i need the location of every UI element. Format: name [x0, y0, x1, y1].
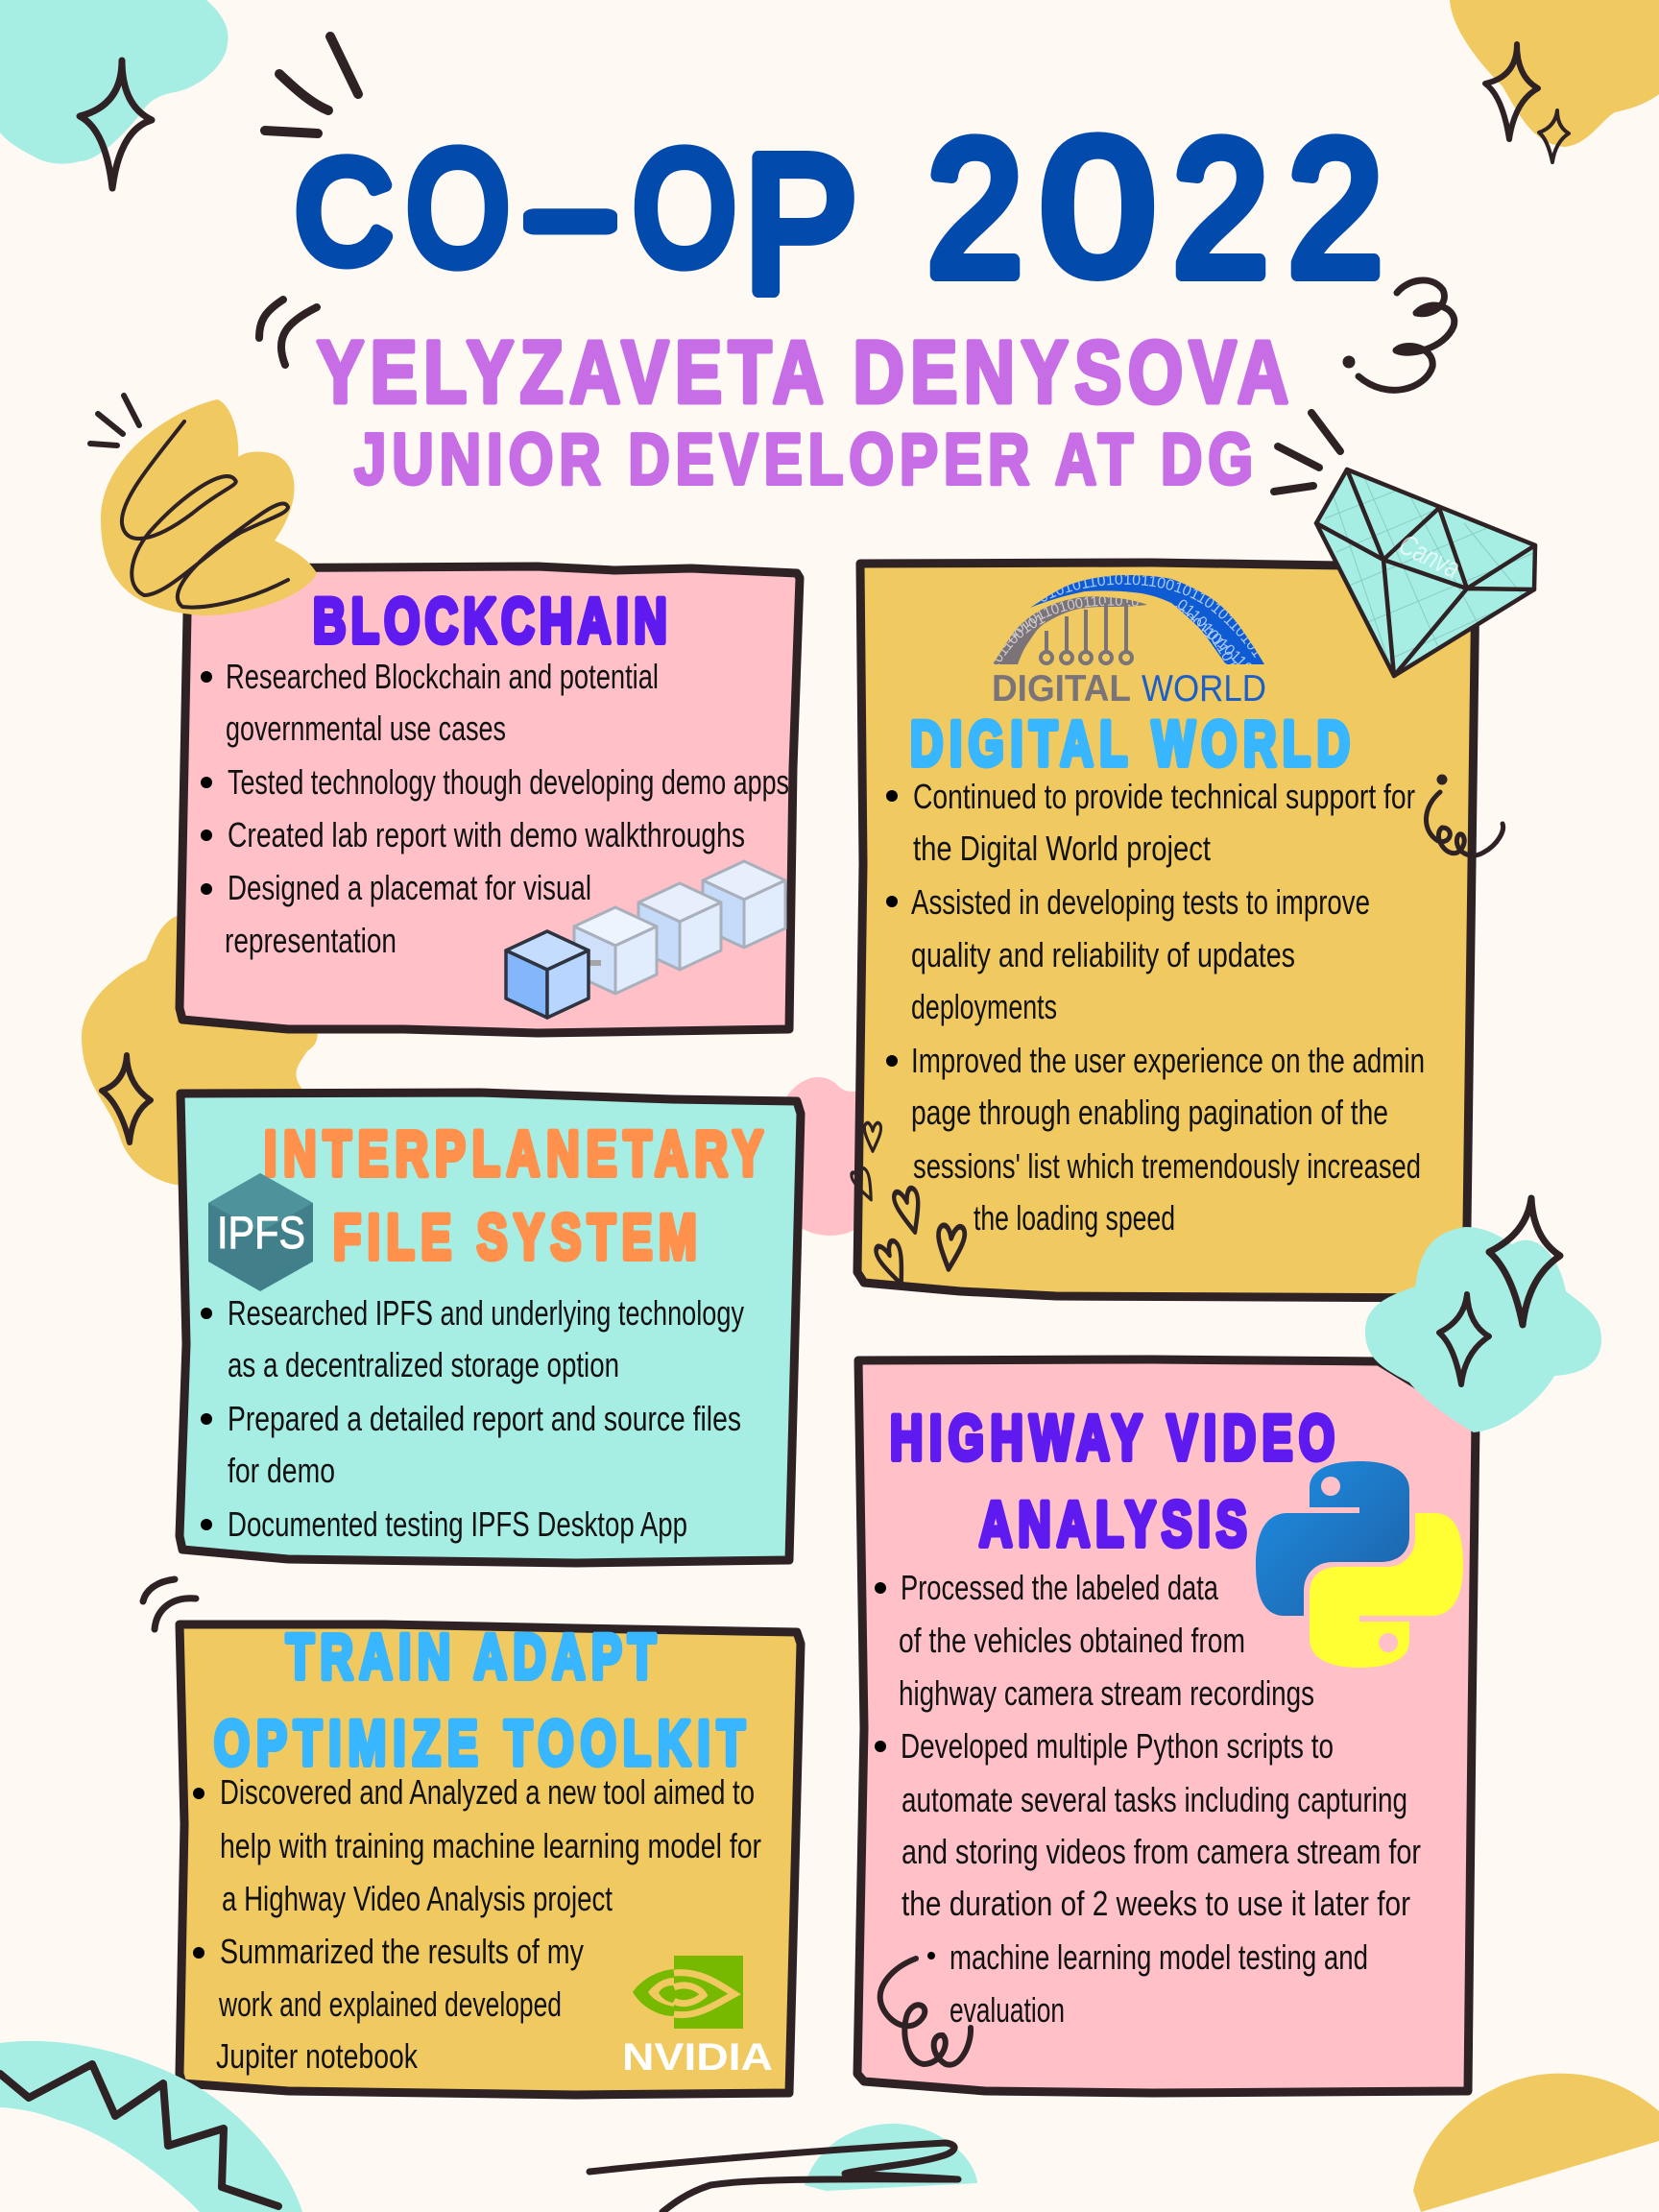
heading: optimize toolkit: OPTIMIZE TOOLKIT — [214, 1708, 745, 1779]
icon: flower scribble — [122, 421, 288, 608]
icon: digital world logo: 1001001010110011010110101 — [1116, 591, 1252, 664]
icon: ipfs hexagon: IPFS — [217, 1207, 305, 1258]
text block: blockchain bullets: representation — [225, 921, 397, 960]
icon: nvidia logo: NVIDIA — [622, 2036, 773, 2079]
text block: digital world bullets: quality and reliability of updates — [911, 935, 1295, 974]
title: 0 — [1041, 100, 1155, 314]
text block: digital world bullets — [886, 777, 1425, 1238]
icon: sparkle right small — [1439, 1294, 1489, 1384]
text block: toolkit bullets: a Highway Video Analysis project — [222, 1879, 613, 1918]
icon: digital world logo: 0101100101 — [993, 614, 1046, 664]
icon: curl on highway panel — [880, 1959, 971, 2065]
icon: digital world logo: DIGITAL — [992, 668, 1131, 709]
panel: highway video analysis — [857, 1359, 1476, 2093]
icon: digital world logo: 0110101101 — [1178, 599, 1237, 664]
text block: blockchain bullets: Researched Blockchain and potential — [226, 657, 659, 696]
icon: ipfs hexagon — [208, 1173, 313, 1291]
blob: yellow flower — [101, 399, 317, 615]
title: C — [296, 131, 392, 292]
icon: python logo — [1256, 1461, 1463, 1668]
text block: digital world bullets: the loading speed — [974, 1198, 1175, 1238]
text block: ipfs bullets — [201, 1293, 744, 1544]
text block: toolkit bullets: Discovered and Analyzed a new tool aimed to — [220, 1772, 755, 1812]
icon: hearts — [850, 1123, 966, 1288]
blob: pink between columns — [782, 1077, 869, 1236]
text block: ipfs bullets: Researched IPFS and underlying technology — [228, 1293, 744, 1333]
icon: ticks by flower — [90, 396, 139, 445]
heading: file system: FILE SYSTEM — [333, 1202, 697, 1273]
text block: toolkit bullets: help with training machine learning model for — [220, 1826, 761, 1865]
text block: digital world bullets: sessions' list which tremendously increased — [913, 1146, 1421, 1186]
text block: toolkit bullets: Summarized the results of my — [220, 1932, 584, 1971]
text block: highway bullets — [875, 1568, 1421, 2030]
text block: digital world bullets: Improved the user experience on the admin — [911, 1041, 1425, 1080]
icon: sparkle right large — [1489, 1198, 1560, 1325]
icon: digital world logo — [992, 575, 1266, 709]
title: O — [634, 119, 735, 298]
panel: interplanetary file system — [180, 1093, 801, 1563]
text block: ipfs bullets: Documented testing IPFS Desktop App — [228, 1504, 687, 1544]
icon: digital world logo: 0101101011010011010100110 — [1000, 596, 1139, 653]
icon: spiral top right — [1346, 280, 1455, 390]
text block: blockchain bullets: governmental use cases — [226, 709, 506, 748]
text block: digital world bullets: deployments — [911, 987, 1057, 1026]
text block: highway bullets: machine learning model testing and — [950, 1937, 1368, 1977]
text block: highway bullets: automate several tasks including capturing — [902, 1780, 1407, 1819]
icon: sparkle top right large — [1485, 44, 1538, 139]
icon: digital world logo: WORLD — [1142, 668, 1266, 709]
icon: zigzag bottom left — [0, 2064, 278, 2206]
title: 2 — [927, 102, 1022, 316]
heading: analysis: ANALYSIS — [979, 1489, 1247, 1560]
blob: yellow bottom right — [1413, 2074, 1659, 2212]
icon: bottom scribble — [589, 2143, 958, 2212]
blob: yellow left behind panels — [82, 915, 318, 1186]
text block: highway bullets: Developed multiple Python scripts to — [901, 1726, 1334, 1766]
icon: arc ticks above toolkit panel — [143, 1579, 196, 1629]
panel: blockchain — [180, 566, 800, 1033]
text block: blockchain bullets: Designed a placemat for visual — [228, 868, 591, 907]
panel: train adapt optimize toolkit — [180, 1622, 801, 2095]
icon: sparkle top right small — [1539, 110, 1569, 162]
heading: blockchain: BLOCKCHAIN — [313, 586, 667, 657]
icon: curl on digital world panel — [1426, 777, 1503, 855]
icon: ticks top — [265, 36, 358, 133]
subtitle: name: YELYZAVETA DENYSOVA — [317, 323, 1288, 421]
text block: ipfs bullets: Prepared a detailed report and source files — [228, 1399, 741, 1438]
text block: digital world bullets: page through enabling pagination of the — [911, 1093, 1388, 1132]
icon: blockchain cubes — [506, 861, 785, 1018]
blob: teal top left — [0, 0, 228, 164]
title — [296, 100, 1382, 332]
text block: digital world bullets: Continued to provide technical support for — [913, 777, 1415, 816]
icon: gem: Canva — [1394, 529, 1465, 585]
title: 2 — [1288, 102, 1382, 316]
icon: gem — [1316, 469, 1536, 676]
text block: blockchain bullets — [201, 657, 789, 960]
heading: digital world: DIGITAL WORLD — [910, 709, 1350, 780]
title: O — [407, 119, 509, 298]
text block: highway bullets: of the vehicles obtained from — [899, 1621, 1245, 1660]
text block: highway bullets: and storing videos from camera stream for — [902, 1832, 1421, 1871]
text block: highway bullets: the duration of 2 weeks to use it later for — [902, 1884, 1410, 1923]
icon: digital world logo: 01010110101011001011010110101 — [1041, 575, 1258, 659]
text block: digital world bullets: the Digital World project — [913, 829, 1211, 868]
text block: digital world bullets: Assisted in developing tests to improve — [911, 882, 1370, 922]
title: P — [744, 115, 857, 332]
panel: digital world — [850, 559, 1505, 1302]
text block: toolkit bullets — [193, 1772, 761, 2076]
text block: ipfs bullets: as a decentralized storage option — [228, 1345, 619, 1384]
icon: sparkle left — [102, 1055, 151, 1142]
title: 2 — [1173, 102, 1268, 316]
text block: highway bullets: evaluation — [950, 1990, 1065, 2030]
text block: ipfs bullets: for demo — [228, 1451, 335, 1490]
text block: highway bullets: highway camera stream recordings — [899, 1673, 1314, 1713]
text block: toolkit bullets: Jupiter notebook — [216, 2036, 419, 2076]
blob: yellow top right — [1450, 0, 1659, 147]
text block: blockchain bullets: Created lab report with demo walkthroughs — [228, 815, 745, 854]
blob: teal bottom centre — [805, 2124, 977, 2191]
icon: arc ticks by name — [259, 300, 317, 365]
text block: toolkit bullets: work and explained developed — [218, 1984, 562, 2024]
text block: blockchain bullets: Tested technology though developing demo apps — [228, 762, 789, 802]
subtitle: role: JUNIOR DEVELOPER AT DG — [354, 421, 1253, 500]
title: - — [522, 118, 618, 301]
heading: interplanetary: INTERPLANETARY — [264, 1118, 763, 1190]
icon: ticks by gem — [1274, 413, 1340, 492]
heading: highway video: HIGHWAY VIDEO — [890, 1403, 1334, 1474]
heading: train adapt: TRAIN ADAPT — [286, 1622, 656, 1693]
blob: teal right overlapping panels — [1365, 1227, 1601, 1432]
text block: highway bullets: Processed the labeled data — [901, 1568, 1219, 1607]
icon: sparkle top left — [80, 60, 152, 188]
icon: nvidia logo — [622, 1956, 773, 2079]
blob: teal crescent bottom left — [0, 2041, 302, 2212]
